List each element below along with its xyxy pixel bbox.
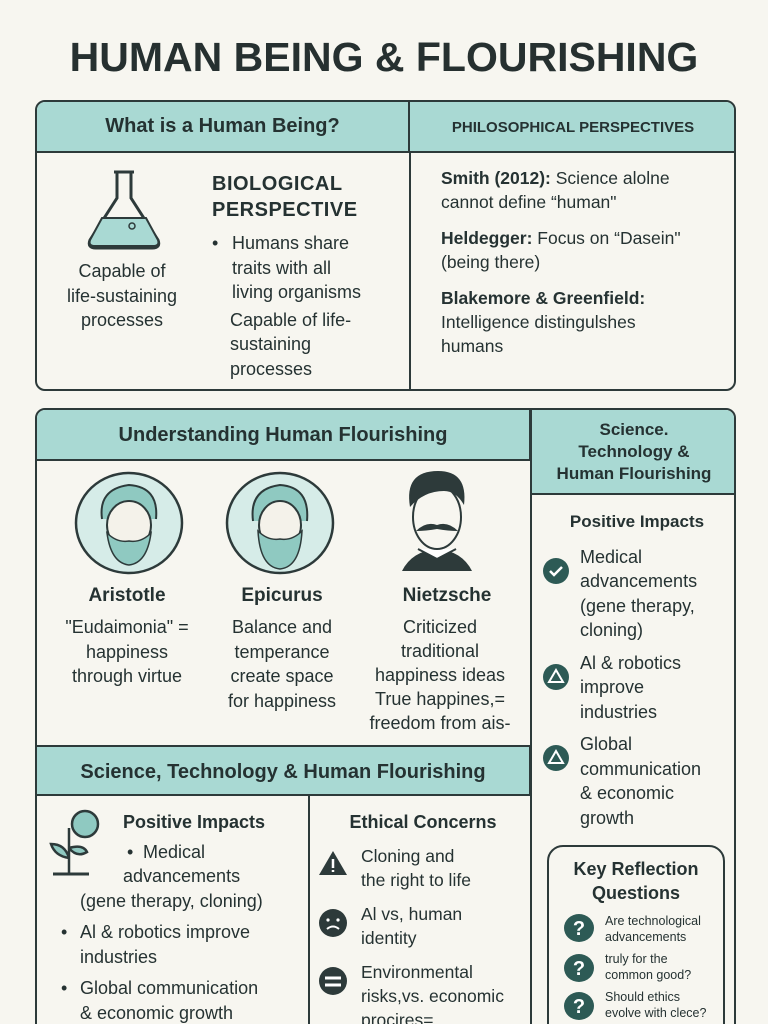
key reflection questions: Questions bbox=[592, 883, 680, 903]
right column positive impacts: advancements bbox=[580, 571, 697, 591]
right column positive impacts: communication bbox=[580, 758, 701, 778]
key reflection questions: truly for the bbox=[605, 952, 668, 966]
positive impacts list bbox=[61, 812, 265, 1023]
positive impacts list: • bbox=[127, 842, 133, 862]
header right bbox=[410, 102, 736, 153]
key reflection questions: ? bbox=[573, 958, 585, 980]
key reflection questions: ? bbox=[573, 996, 585, 1018]
positive impacts list: (gene therapy, cloning) bbox=[80, 890, 263, 910]
ethical concerns: risks,vs. economic bbox=[361, 986, 504, 1006]
positive impacts list: Global communication bbox=[80, 978, 258, 998]
biological perspective: sustaining bbox=[230, 334, 311, 354]
ethical concerns: the right to life bbox=[361, 870, 471, 890]
philosophers: Epicurus bbox=[241, 585, 323, 606]
biological perspective: Humans share bbox=[232, 233, 349, 253]
positive impacts list: • bbox=[61, 978, 67, 998]
header left bbox=[37, 102, 410, 153]
text: flask caption bbox=[67, 261, 177, 330]
icon: plant bbox=[49, 810, 100, 876]
right column positive impacts: Al & robotics bbox=[580, 652, 681, 672]
philosophical quotes: Heldegger: Focus on “Dasein" bbox=[441, 228, 681, 248]
right column header: Human Flourishing bbox=[557, 464, 711, 483]
right column positive impacts: Positive Impacts bbox=[570, 512, 704, 531]
right column positive impacts: Medical bbox=[580, 546, 642, 566]
biological perspective: traits with all bbox=[232, 258, 331, 278]
philosophical quotes: humans bbox=[441, 336, 503, 356]
philosophical quotes: Intelligence distingulshes bbox=[441, 312, 636, 332]
positive impacts list: Positive Impacts bbox=[123, 812, 265, 832]
biological perspective: Capable of life- bbox=[230, 310, 351, 330]
title: HUMAN BEING & FLOURISHING bbox=[70, 34, 698, 80]
ethical concerns: Cloning and bbox=[361, 846, 454, 866]
header: science technology bbox=[37, 745, 531, 796]
icon: epicurus bbox=[226, 472, 334, 574]
ethical concerns: Al vs, human bbox=[361, 904, 462, 924]
icon: nietzsche bbox=[402, 471, 472, 571]
biological perspective: • bbox=[212, 233, 218, 253]
text: flask caption: life-sustaining bbox=[67, 286, 177, 306]
right column header: Technology & bbox=[578, 442, 690, 461]
right column positive impacts: industries bbox=[580, 702, 657, 722]
philosophical quotes: (being there) bbox=[441, 252, 540, 272]
icon: flask bbox=[88, 170, 160, 250]
philosophers: freedom from ais- bbox=[369, 713, 511, 733]
philosophers: Balance and bbox=[232, 617, 332, 637]
biological perspective: processes bbox=[230, 358, 312, 378]
icon: aristotle bbox=[74, 472, 184, 574]
right column positive impacts: improve bbox=[580, 677, 644, 697]
panel: flourishing bbox=[35, 408, 736, 1024]
philosophers: traditional bbox=[401, 641, 479, 661]
philosophers: Criticized bbox=[403, 617, 477, 637]
descriptions: happiness bbox=[86, 642, 168, 662]
philosophical quotes: cannot define “human" bbox=[441, 192, 616, 212]
text: flask caption: processes bbox=[81, 310, 163, 330]
header: understanding bbox=[37, 410, 531, 461]
biological perspective bbox=[212, 173, 361, 379]
right column positive impacts: cloning) bbox=[580, 620, 643, 640]
biological perspective: BIOLOGICAL bbox=[212, 173, 343, 195]
right column header: Science. bbox=[600, 420, 668, 439]
positive impacts list: & economic growth bbox=[80, 1002, 233, 1022]
header right: PHILOSOPHICAL PERSPECTIVES bbox=[452, 119, 694, 136]
philosophers: create space bbox=[230, 666, 334, 686]
key reflection questions: Are technological bbox=[605, 914, 701, 928]
right column positive impacts: growth bbox=[580, 808, 634, 828]
key reflection questions: ? bbox=[573, 918, 585, 940]
ethical concerns: Ethical Concerns bbox=[349, 812, 497, 832]
positive impacts list: industries bbox=[80, 946, 157, 966]
key reflection questions: Should ethics bbox=[605, 990, 680, 1004]
right column positive impacts: Global bbox=[580, 734, 632, 754]
positive impacts list: Al & robotics improve bbox=[80, 922, 250, 942]
philosophers: for happiness bbox=[228, 690, 336, 710]
header: understanding: Understanding Human Flourishing bbox=[119, 424, 447, 446]
philosophical quotes bbox=[441, 168, 681, 356]
positive impacts list: advancements bbox=[123, 866, 240, 886]
biological perspective: living organisms bbox=[232, 282, 361, 302]
key reflection questions: advancements bbox=[605, 930, 686, 944]
positive impacts list: Medical bbox=[143, 842, 205, 862]
philosophical quotes: Smith (2012): Science alolne bbox=[441, 168, 670, 188]
descriptions: through virtue bbox=[72, 666, 182, 686]
names: Aristotle bbox=[88, 585, 166, 606]
philosophical quotes: Blakemore & Greenfield: bbox=[441, 288, 645, 308]
header: science technology: Science, Technology & Human Flourishing bbox=[80, 761, 486, 783]
key reflection questions: common good? bbox=[605, 968, 691, 982]
key reflection questions: Key Reflection bbox=[573, 859, 699, 879]
key reflection questions: evolve with clece? bbox=[605, 1006, 706, 1020]
ethical concerns bbox=[319, 812, 504, 1024]
philosophers bbox=[65, 471, 511, 733]
philosophers: Nietzsche bbox=[403, 585, 491, 606]
right column positive impacts bbox=[543, 512, 704, 828]
positive impacts list: • bbox=[61, 922, 67, 942]
philosophers: True happines,= bbox=[375, 689, 505, 709]
descriptions: "Eudaimonia" = bbox=[65, 617, 189, 637]
panel: what is a human being bbox=[35, 100, 736, 391]
text: flask caption: Capable of bbox=[78, 261, 166, 281]
descriptions bbox=[65, 617, 189, 686]
philosophers: happiness ideas bbox=[375, 665, 505, 685]
right column header bbox=[532, 410, 736, 495]
ethical concerns: identity bbox=[361, 928, 416, 948]
biological perspective: PERSPECTIVE bbox=[212, 199, 358, 221]
key reflection questions bbox=[547, 845, 725, 1024]
ethical concerns: Environmental bbox=[361, 962, 473, 982]
right column positive impacts: & economic bbox=[580, 783, 674, 803]
right column positive impacts: (gene therapy, bbox=[580, 596, 695, 616]
philosophers: temperance bbox=[234, 642, 330, 662]
header left: What is a Human Being? bbox=[105, 115, 340, 137]
